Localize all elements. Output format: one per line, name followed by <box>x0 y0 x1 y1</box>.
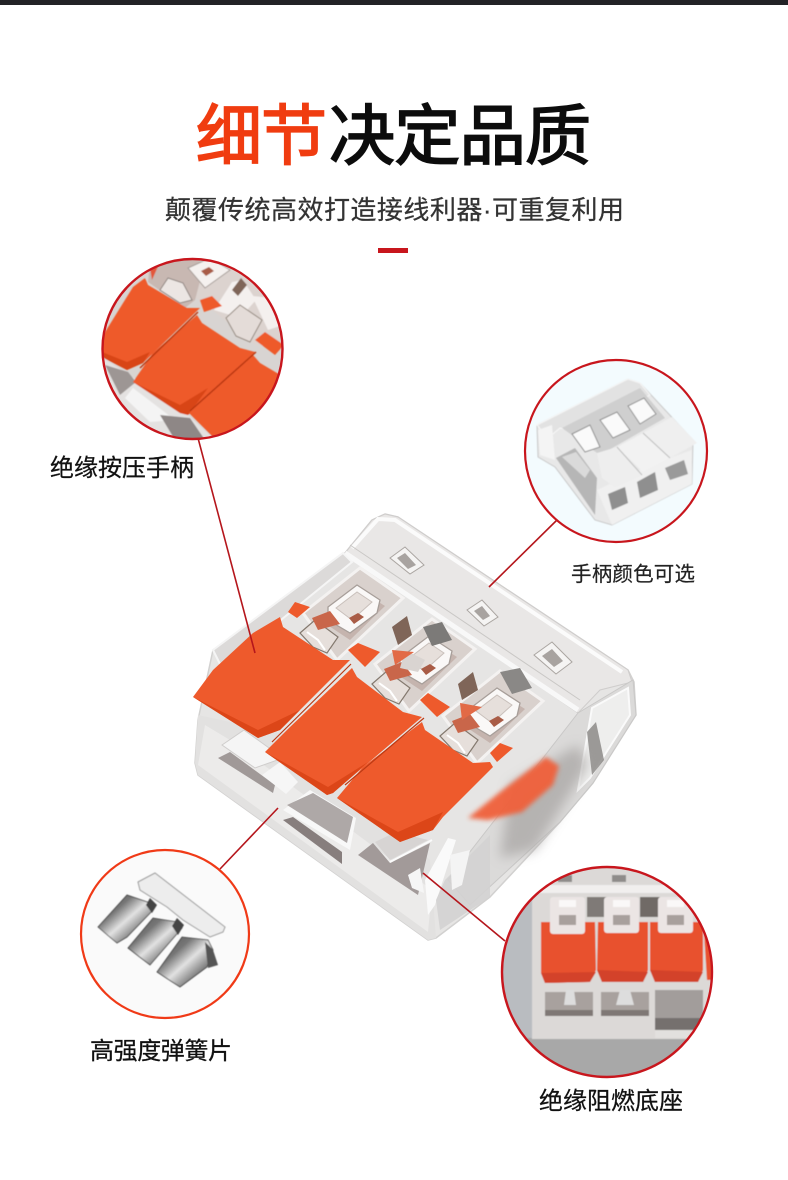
leader line: insulated handle <box>198 438 255 653</box>
lower windows <box>544 992 594 1011</box>
clear parts above handles <box>144 278 282 350</box>
callout circle: spring <box>81 850 249 1018</box>
callout circle: base <box>495 866 722 1083</box>
label: insulated handle: 绝缘按压手柄 <box>50 455 194 482</box>
red accent dash <box>378 248 408 253</box>
front lower section <box>195 715 436 940</box>
handles <box>102 278 200 370</box>
title <box>196 99 591 173</box>
title: 决定品质 <box>329 99 591 173</box>
title: 细节 <box>196 99 327 173</box>
connector main product image <box>193 514 636 940</box>
orange reflection <box>468 757 559 820</box>
label: base: 绝缘阻燃底座 <box>539 1088 683 1115</box>
top black bar <box>0 0 788 5</box>
spring slots <box>218 730 490 930</box>
leader line: colour options <box>489 520 557 587</box>
left shoulder <box>213 553 352 668</box>
orange handle left <box>193 602 350 738</box>
leader line: spring <box>220 808 278 869</box>
clear housing <box>195 514 636 940</box>
orange handle middle <box>265 643 422 795</box>
subtitle: 颠覆传统高效打造接线利器·可重复利用 <box>165 195 624 225</box>
handle compartments <box>300 568 543 763</box>
clear levers <box>550 897 585 934</box>
label: colour options: 手柄颜色可选 <box>571 563 695 586</box>
callout circle: colour options <box>525 360 707 542</box>
callout circle: handle close-up <box>102 250 290 440</box>
lower clear parts <box>102 357 215 440</box>
rear bar slots <box>390 547 572 674</box>
leader line: base <box>423 873 505 941</box>
handles <box>541 922 596 983</box>
right side wall <box>448 680 636 905</box>
orange handle right <box>337 693 513 842</box>
rear bar <box>345 514 632 713</box>
label: spring: 高强度弹簧片 <box>90 1038 232 1065</box>
